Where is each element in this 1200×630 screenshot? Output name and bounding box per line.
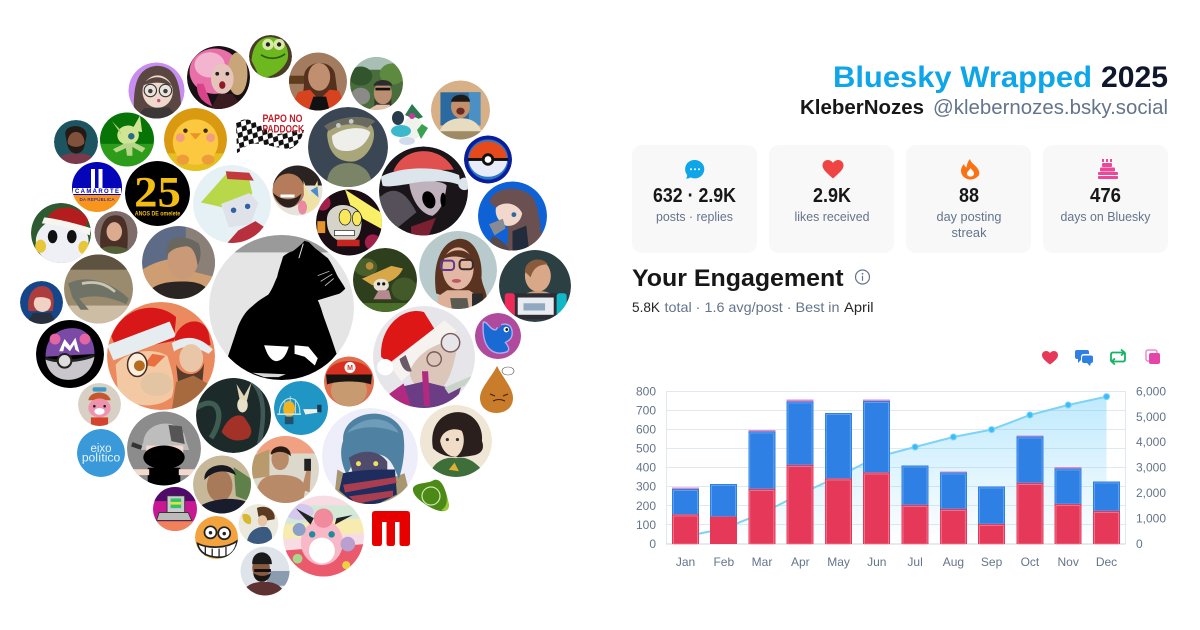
icon: like legend	[1042, 351, 1058, 364]
stat card: posts and replies: 632 · 2.9K	[653, 185, 736, 207]
month labels: Feb	[713, 555, 734, 569]
right axis labels: 6,000	[1136, 384, 1166, 398]
avatar: blue duck on purple	[475, 313, 521, 359]
stat card: likes received: likes received	[794, 210, 870, 224]
avatar: armored warrior	[238, 504, 278, 544]
avatar: mushroom hat character	[353, 248, 417, 312]
month labels: Jun	[867, 555, 886, 569]
avatar: papo no paddock logo: PAPO NO	[262, 113, 303, 125]
avatar: camarote da republica	[72, 162, 122, 213]
month labels	[676, 555, 1117, 569]
month labels: Mar	[752, 555, 772, 569]
right axis labels: 1,000	[1136, 512, 1166, 526]
avatar: camarote da republica: DA REPÚBLICA	[80, 196, 114, 202]
user handle: KleberNozes	[800, 97, 924, 119]
monthly bars	[672, 400, 1120, 544]
icon: quote legend	[1146, 350, 1160, 364]
user handle: @klebernozes.bsky.social	[933, 97, 1168, 119]
avatar: man in mario cap: M	[347, 365, 353, 372]
stat card: likes received: 2.9K	[813, 185, 851, 207]
avatar: retro computer	[153, 487, 197, 532]
avatar: man in mario cap	[324, 356, 374, 406]
stat card: posts and replies: posts · replies	[656, 210, 733, 224]
avatar: master ball	[36, 320, 104, 388]
avatar: hollow knight with santa hat	[379, 146, 471, 236]
avatar: camarote da republica: CAMAROTE	[75, 189, 119, 195]
avatar: girl with long hair	[94, 211, 138, 254]
left axis labels: 200	[636, 499, 656, 513]
avatar: papo no paddock logo: PADDOCK	[262, 124, 304, 136]
avatar: man with beanie and sea	[240, 546, 290, 596]
avatar: eixo politico: político	[82, 453, 120, 465]
month labels: Apr	[791, 555, 810, 569]
avatar: red M logo	[372, 511, 410, 546]
avatar: grinning cartoon face	[195, 516, 238, 559]
avatar: man holding switch	[499, 250, 571, 322]
avatar: 25 anos de omelete	[125, 161, 190, 226]
icon: info	[856, 270, 870, 284]
stat card: day posting streak	[906, 145, 1031, 253]
left axis labels: 100	[636, 518, 656, 532]
avatar: halo helmet character	[308, 107, 388, 187]
avatar: bearded illustrated man	[54, 120, 98, 164]
avatar: yellow robot comic	[315, 190, 382, 256]
stat card: posts and replies	[632, 145, 757, 253]
avatar: pink toy	[78, 383, 121, 426]
left axis labels	[636, 384, 656, 551]
icon: reply legend	[1075, 350, 1093, 366]
avatar: light bulb in cage	[274, 381, 328, 435]
avatar: woman in red blazer	[289, 52, 347, 110]
avatar: woman with purple glasses	[419, 231, 497, 309]
left axis labels: 700	[636, 404, 656, 418]
right axis labels: 0	[1136, 537, 1143, 551]
stat card: days on Bluesky: 476	[1090, 185, 1121, 207]
month labels: Aug	[943, 555, 964, 569]
left axis labels: 600	[636, 422, 656, 436]
icon: flame	[961, 159, 979, 180]
left axis labels: 800	[636, 384, 656, 398]
month labels: Dec	[1096, 555, 1117, 569]
left axis labels: 400	[636, 460, 656, 474]
avatar: glasses girl	[128, 62, 184, 118]
month labels: Sep	[981, 555, 1003, 569]
right axis labels: 4,000	[1136, 435, 1166, 449]
avatar: eixo politico: eixo	[90, 443, 112, 455]
title: 2025	[1101, 61, 1168, 94]
month labels: May	[827, 555, 850, 569]
avatar: yellow chick	[164, 108, 227, 172]
avatar: link in red	[193, 165, 271, 243]
avatar: man at sunset	[142, 226, 215, 299]
right axis labels: 2,000	[1136, 486, 1166, 500]
avatar: pokeball	[464, 136, 512, 184]
avatar: eixo politico	[77, 429, 125, 477]
avatar: hornet in red cloak	[196, 378, 271, 453]
stacked bar and line chart	[636, 384, 1166, 569]
avatar: emolga with santa hat	[31, 203, 91, 264]
icon: birthday cake	[1098, 159, 1118, 179]
engagement summary: April	[844, 299, 874, 315]
icon: heart	[822, 160, 844, 178]
stat card: likes received	[769, 145, 894, 253]
cumulative area and line	[686, 394, 1110, 544]
avatar: black cat with teacup (main)	[209, 235, 354, 383]
avatar: celebi	[100, 112, 154, 166]
month labels: Jan	[676, 555, 695, 569]
avatar: red haired anime	[20, 281, 63, 324]
right axis labels: 3,000	[1136, 460, 1166, 474]
chart legend icons	[1042, 350, 1160, 366]
avatar: dinosaur with santa hats	[107, 302, 215, 410]
stat card: day posting streak: day posting	[936, 210, 1002, 224]
left axis labels: 0	[649, 537, 656, 551]
right axis labels	[1136, 384, 1166, 551]
stat card: days on Bluesky: days on Bluesky	[1060, 210, 1151, 224]
avatar: 25 anos de omelete: ANOS DE omelete	[135, 211, 181, 218]
month labels: Oct	[1021, 555, 1040, 569]
icon: chat bubble	[685, 160, 704, 179]
avatar: pink curly hair	[187, 46, 250, 109]
avatar: coxinha	[480, 366, 514, 413]
right axis labels: 5,000	[1136, 410, 1166, 424]
left axis labels: 500	[636, 442, 656, 456]
avatar: man in green forest	[349, 57, 405, 110]
left axis labels: 300	[636, 480, 656, 494]
stat card: day posting streak: streak	[952, 226, 987, 240]
avatar: man with dark hair	[193, 456, 251, 514]
avatar: green logo	[413, 480, 449, 511]
title: Bluesky Wrapped	[833, 61, 1092, 94]
avatar: anime girl on blue	[478, 182, 547, 251]
avatar: man shouting	[431, 80, 490, 140]
engagement summary: 5.8K	[632, 299, 661, 315]
avatar: smiling bearded man	[272, 166, 322, 216]
stat card: day posting streak: 88	[959, 185, 979, 207]
month labels: Nov	[1058, 555, 1079, 569]
avatar: wigglytuff	[283, 496, 364, 578]
engagement summary: total · 1.6 avg/post · Best in	[664, 299, 840, 315]
avatar: 25 anos de omelete: 25	[134, 170, 181, 216]
stat card: days on Bluesky	[1043, 145, 1168, 253]
avatar: small anime figure with flowers	[391, 104, 428, 145]
avatar: papo no paddock logo	[236, 113, 304, 153]
avatar: komodo lizard	[64, 254, 133, 325]
avatar: blue haired anime with scarf	[322, 408, 418, 504]
heading: your engagement: Your Engagement	[632, 265, 844, 292]
user handle	[800, 97, 1168, 119]
icon: repost legend	[1111, 350, 1125, 364]
avatar: masked ninja	[127, 412, 201, 487]
panel: avatar bubble cluster	[20, 35, 571, 596]
avatar: shirtless man selfie	[252, 436, 319, 503]
avatar: dark haired girl with green cloak	[420, 405, 492, 477]
avatar: kermit	[249, 35, 292, 78]
avatar: santa hat purple character	[373, 306, 475, 408]
month labels: Jul	[907, 555, 923, 569]
gridlines	[666, 391, 1126, 544]
